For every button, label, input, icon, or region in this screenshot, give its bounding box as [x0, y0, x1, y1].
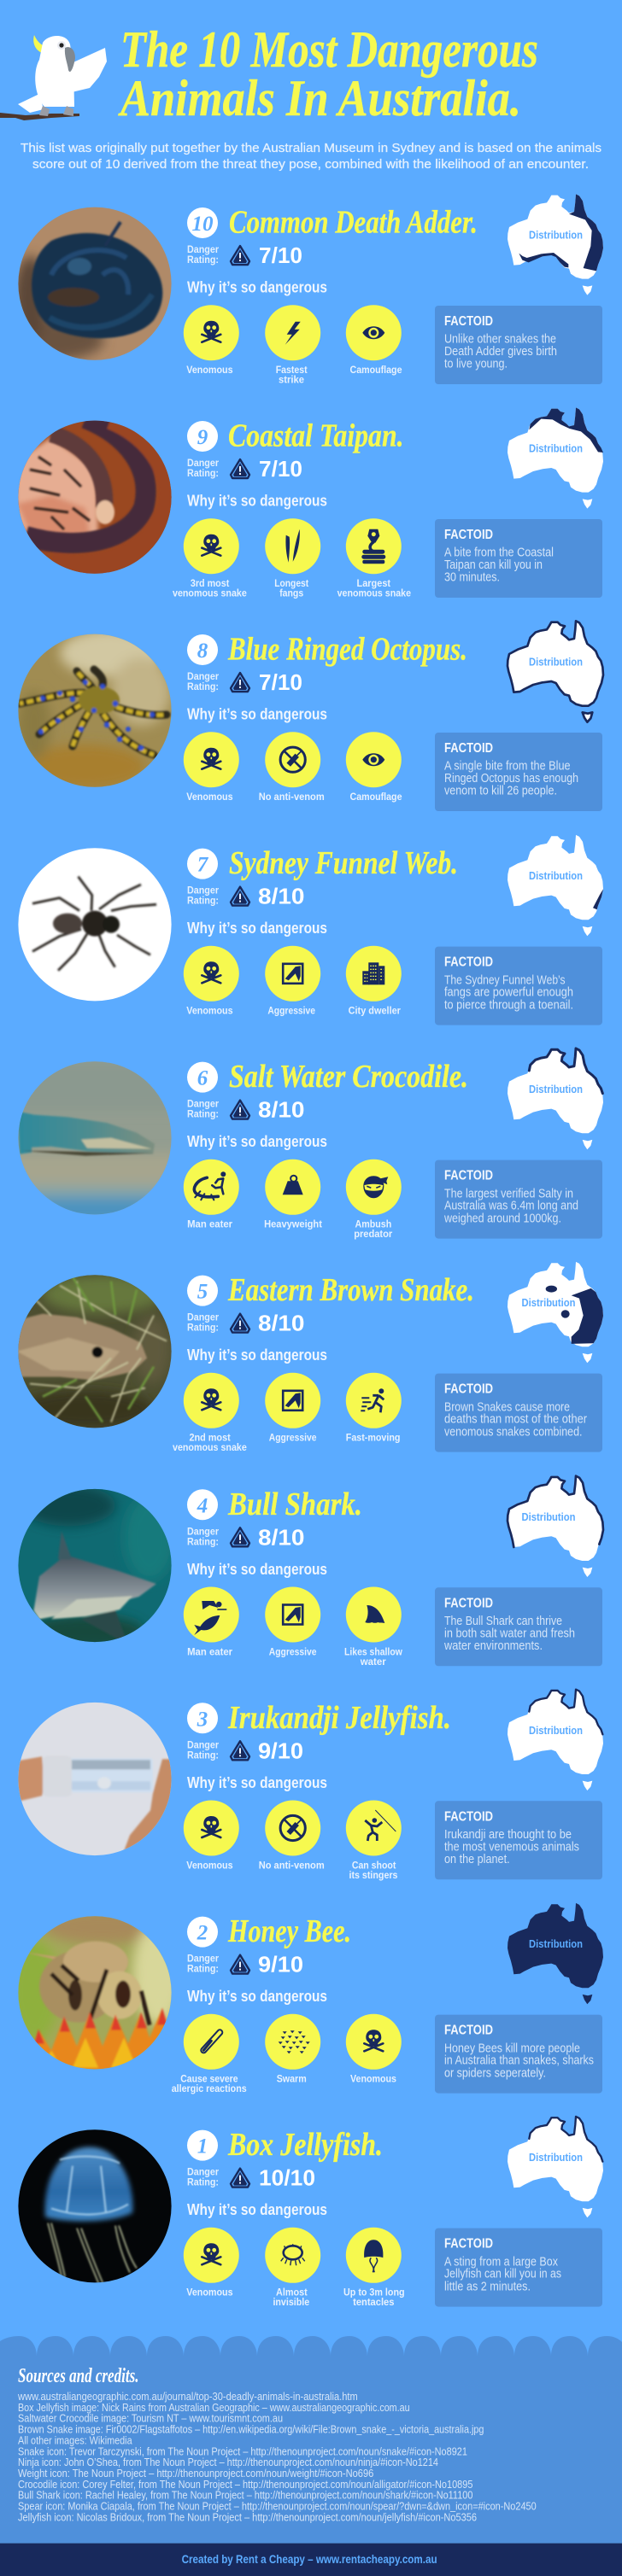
panel: 1 Box Jellyfish	[17, 2117, 603, 2308]
photo: death adder	[18, 207, 172, 360]
reason: venomous	[184, 946, 239, 1017]
reason: camouflage	[346, 732, 402, 803]
reason: up to 3m long tentacles	[343, 2228, 405, 2308]
factoid: FACTOID	[444, 1809, 493, 1824]
danger rating: 7/10	[259, 669, 302, 695]
factoid: weighed around 1000kg.	[443, 1212, 561, 1225]
distribution map	[508, 1476, 603, 1577]
reason: venomous: Venomous	[350, 2073, 396, 2085]
distribution map	[508, 407, 603, 509]
photo: salt water crocodile	[18, 1061, 172, 1214]
danger rating	[187, 1738, 303, 1763]
reason: aggressive	[265, 946, 320, 1017]
factoid: fangs are powerful enough	[444, 986, 573, 1000]
panel: sources and credits	[0, 2336, 622, 2543]
distribution map	[508, 835, 603, 936]
credits list: Weight icon: The Noun Project – http://thenounproject.com/noun/weight/#icon-No696	[18, 2468, 373, 2480]
distribution map: Distribution	[529, 656, 583, 668]
distribution map	[508, 2117, 603, 2217]
reason: man eater: Man eater	[187, 1645, 232, 1657]
danger rating	[187, 456, 302, 482]
factoid	[435, 2015, 602, 2094]
danger rating: Danger	[187, 243, 219, 255]
credits list	[17, 2391, 537, 2523]
reason: aggressive	[265, 1373, 320, 1444]
factoid: Irukandji are thought to be	[444, 1828, 572, 1842]
animal name: Common Death Adder.	[229, 205, 478, 241]
credits list: Snake icon: Trevor Tarczynski, from The Noun Project – http://thenounproject.com/noun/snake/#icon-No8921	[18, 2445, 467, 2457]
photo: bull shark	[17, 1485, 175, 1649]
rank badge: 3	[197, 1708, 208, 1731]
danger rating: 8/10	[258, 1311, 304, 1336]
factoid: Honey Bees kill more people	[444, 2042, 580, 2055]
distribution map	[508, 1262, 603, 1363]
distribution map	[508, 194, 603, 295]
animal name: Coastal Taipan.	[228, 418, 404, 454]
animal name: Blue Ringed Octopus.	[227, 632, 467, 668]
reason: city dweller	[346, 946, 402, 1017]
photo: honey bee on flower	[18, 1916, 172, 2070]
reason: likes shallow water	[344, 1586, 402, 1668]
reason: ambush predator	[346, 1159, 402, 1240]
factoid: The Bull Shark can thrive	[444, 1615, 562, 1628]
panel: 7 Sydney Funnel Web	[17, 835, 603, 1025]
danger rating	[187, 669, 302, 695]
danger rating: Danger	[187, 1311, 219, 1323]
rank badge	[187, 207, 218, 238]
factoid: The Sydney Funnel Web’s	[444, 973, 566, 987]
subheading: Why it’s so dangerous	[187, 1561, 327, 1578]
danger rating: 9/10	[258, 1952, 303, 1977]
credits heading: Sources and credits.	[18, 2365, 138, 2387]
reason: venomous: Venomous	[186, 1859, 233, 1871]
panel: 2 Honey Bee	[9, 1903, 603, 2094]
factoid: venomous snakes combined.	[444, 1425, 583, 1439]
reason: up to 3m long tentacles: Up to 3m long	[343, 2287, 405, 2299]
danger rating	[187, 1524, 304, 1550]
danger rating	[187, 2165, 315, 2191]
reason: swarm: Swarm	[277, 2073, 307, 2085]
reason: fast-moving	[346, 1373, 402, 1444]
factoid: deaths than most of the other	[444, 1413, 587, 1427]
rank badge	[187, 1703, 218, 1733]
reason: swarm	[265, 2014, 320, 2085]
animal name: Irukandji Jellyfish.	[227, 1700, 451, 1736]
reason: man eater	[184, 1159, 239, 1230]
reason: venomous	[184, 1800, 239, 1871]
reason: almost invisible: invisible	[273, 2296, 309, 2308]
reason: likes shallow water: water	[360, 1656, 386, 1668]
subheading: Why it’s so dangerous	[187, 278, 327, 295]
reason: venomous	[184, 305, 239, 376]
danger rating: Danger	[187, 885, 219, 897]
reason: no anti-venom	[259, 1800, 325, 1871]
factoid: FACTOID	[444, 741, 493, 756]
photo: coastal taipan	[15, 418, 174, 575]
reason: cause severe allergic reactions: Cause severe	[180, 2073, 238, 2085]
factoid	[435, 1374, 602, 1452]
factoid: FACTOID	[444, 314, 493, 329]
credits list: www.australiangeographic.com.au/journal/top-30-deadly-animals-in-australia.htm	[17, 2391, 358, 2403]
danger rating: Rating:	[187, 1749, 219, 1761]
subheading: Why it’s so dangerous	[187, 1346, 327, 1364]
distribution map: Distribution	[529, 442, 583, 454]
animal name: Salt Water Crocodile.	[229, 1059, 468, 1095]
reason: ambush predator: predator	[354, 1228, 392, 1240]
factoid: on the planet.	[444, 1853, 510, 1866]
reason: fastest strike: Fastest	[276, 364, 308, 376]
panel: 3 Irukandji Jellyfish	[13, 1690, 603, 1881]
reason: 3rd most venomous snake	[173, 518, 247, 599]
animal name: Honey Bee.	[227, 1913, 351, 1949]
rank badge	[187, 1276, 218, 1306]
factoid: The largest verified Salty in	[444, 1187, 573, 1200]
reason: aggressive	[265, 1586, 320, 1657]
photo: funnel web spider	[17, 846, 174, 1003]
factoid	[435, 306, 602, 384]
reason: longest fangs	[265, 518, 320, 599]
intro text: This list was originally put together by the Australian Museum in Sydney and is based on the animals	[21, 142, 601, 155]
factoid: FACTOID	[444, 2024, 493, 2038]
animal name: Bull Shark.	[227, 1487, 362, 1522]
reason: no anti-venom: No anti-venom	[259, 1859, 325, 1871]
animal name: Box Jellyfish.	[227, 2127, 383, 2163]
reason: 2nd most venomous snake: venomous snake	[173, 1441, 247, 1453]
credits list: Bull Shark icon: Rachel Healey, from The Noun Project – http://thenounproject.com/noun/shark/#icon-No11100	[18, 2490, 472, 2502]
reason: venomous: Venomous	[186, 1005, 233, 1017]
factoid: FACTOID	[444, 955, 493, 970]
danger rating: Danger	[187, 2166, 219, 2178]
factoid: water environments.	[443, 1639, 543, 1653]
distribution map	[508, 621, 603, 722]
danger rating: Danger	[187, 1525, 219, 1537]
animal name: Eastern Brown Snake.	[227, 1272, 474, 1308]
reason: man eater	[184, 1586, 239, 1657]
factoid: in both salt water and fresh	[444, 1627, 575, 1640]
animal name: Sydney Funnel Web.	[229, 845, 458, 881]
reason: can shoot its stingers	[346, 1800, 402, 1881]
factoid	[435, 733, 602, 811]
reason: aggressive: Aggressive	[267, 1005, 315, 1017]
factoid: Death Adder gives birth	[444, 345, 557, 359]
reason: can shoot its stingers: its stingers	[349, 1869, 398, 1881]
credits list: Box Jellyfish image: Nick Rains from Australian Geographic – www.australiangeographic.com.au	[18, 2402, 410, 2414]
reason: camouflage	[346, 305, 402, 376]
credits list: Crocodile icon: Corey Felter, from The Noun Project – http://thenounproject.com/noun/alligator/#icon-No10895	[18, 2479, 472, 2491]
factoid	[435, 519, 602, 598]
danger rating: Danger	[187, 457, 219, 469]
title: Animals In Australia.	[118, 70, 521, 126]
danger rating: 8/10	[258, 1097, 304, 1123]
factoid: FACTOID	[444, 2237, 493, 2252]
reason: aggressive: Aggressive	[269, 1432, 317, 1444]
factoid: venom to kill 26 people.	[444, 785, 557, 798]
distribution map: Distribution	[529, 1937, 583, 1950]
danger rating	[187, 884, 304, 909]
reason: heavyweight	[264, 1159, 322, 1230]
subheading: Why it’s so dangerous	[187, 1133, 327, 1150]
danger rating: Danger	[187, 1738, 219, 1750]
danger rating	[187, 1311, 304, 1336]
factoid	[435, 1160, 602, 1239]
reason: up to 3m long tentacles: tentacles	[353, 2296, 395, 2308]
photo: irukandji in a vial	[18, 1703, 172, 1856]
distribution map: Distribution	[529, 2151, 583, 2164]
distribution map: Distribution	[529, 1724, 583, 1737]
factoid: FACTOID	[444, 1382, 493, 1397]
reason: no anti-venom: No anti-venom	[259, 791, 325, 803]
distribution map	[508, 1690, 603, 1790]
subheading: Why it’s so dangerous	[187, 1774, 327, 1791]
reason: venomous	[346, 2014, 402, 2085]
factoid: FACTOID	[444, 528, 493, 542]
reason: 2nd most venomous snake: 2nd most	[189, 1432, 231, 1444]
photo: box jellyfish	[17, 2128, 174, 2285]
title: The 10 Most Dangerous	[120, 21, 538, 78]
reason: venomous: Venomous	[186, 2287, 233, 2299]
reason: cause severe allergic reactions: allergic reactions	[172, 2082, 247, 2094]
distribution map: Distribution	[529, 229, 583, 241]
subheading: Why it’s so dangerous	[187, 920, 327, 937]
danger rating: Danger	[187, 1953, 219, 1965]
photo: blue ringed octopus	[17, 629, 174, 789]
factoid: little as 2 minutes.	[444, 2280, 531, 2293]
reason: cause severe allergic reactions	[172, 2014, 247, 2094]
panel: 10 Common Death Adder	[2, 194, 603, 386]
danger rating: 8/10	[258, 884, 304, 909]
rank badge	[187, 849, 218, 879]
reason: venomous: Venomous	[186, 791, 233, 803]
danger rating: 7/10	[259, 456, 302, 482]
rank badge: 7	[197, 854, 209, 877]
danger rating	[187, 1952, 303, 1977]
rank badge: 4	[197, 1494, 208, 1517]
reason: fastest strike	[265, 305, 320, 386]
panel: 9 Coastal Taipan	[15, 407, 603, 599]
panel: 4 Bull Shark	[17, 1476, 603, 1668]
reason: largest venomous snake	[337, 518, 411, 599]
reason: fast-moving: Fast-moving	[346, 1432, 400, 1444]
factoid: Unlike other snakes the	[444, 333, 556, 347]
danger rating: Rating:	[187, 1535, 219, 1547]
danger rating: Rating:	[187, 895, 219, 907]
danger rating	[187, 242, 302, 268]
rank badge: 9	[197, 426, 208, 449]
rank badge	[187, 2130, 218, 2161]
factoid	[435, 2228, 602, 2307]
distribution map: Distribution	[521, 1296, 576, 1309]
factoid: Ringed Octopus has enough	[444, 772, 578, 786]
distribution map: Distribution	[529, 1083, 583, 1095]
factoid: Taipan can kill you in	[444, 558, 543, 572]
distribution map	[508, 1903, 603, 2004]
reason: 2nd most venomous snake	[173, 1373, 247, 1453]
factoid: to live young.	[444, 358, 508, 371]
reason: fastest strike: strike	[279, 374, 304, 386]
factoid: A sting from a large Box	[444, 2255, 559, 2269]
rank badge	[187, 421, 218, 452]
credits list: Brown Snake image: Fir0002/Flagstaffotos – http://en.wikipedia.org/wiki/File:Brown_snake_-_victoria_australia.jpg	[18, 2424, 484, 2436]
credits list: All other images: Wikimedia	[18, 2434, 132, 2446]
reason: camouflage: Camouflage	[350, 364, 402, 376]
danger rating: Rating:	[187, 1108, 219, 1120]
factoid: or spiders seperately.	[444, 2066, 546, 2080]
rank badge: 6	[197, 1067, 208, 1090]
title	[118, 21, 538, 126]
rank badge: 8	[197, 640, 208, 663]
reason: aggressive: Aggressive	[269, 1645, 317, 1657]
icon: cockatoo on branch	[0, 35, 107, 120]
rank badge: 1	[197, 2135, 208, 2158]
danger rating: Rating:	[187, 1963, 219, 1975]
photo: eastern brown snake	[15, 1273, 174, 1430]
intro text: score out of 10 derived from the threat they pose, combined with the likelihood of an encounter.	[32, 158, 589, 172]
factoid: Australia was 6.4m long and	[444, 1200, 578, 1213]
subheading: Why it’s so dangerous	[187, 705, 327, 722]
reason: almost invisible	[265, 2228, 320, 2308]
intro text	[21, 142, 601, 172]
reason: no anti-venom	[259, 732, 325, 803]
distribution map: Distribution	[529, 869, 583, 882]
rank badge: 10	[191, 213, 214, 236]
panel: 6 Salt Water Crocodile	[9, 1049, 603, 1240]
danger rating: Rating:	[187, 2176, 219, 2188]
reason: largest venomous snake: venomous snake	[337, 587, 411, 599]
reason: venomous	[184, 732, 239, 803]
factoid: 30 minutes.	[444, 571, 500, 585]
credits list: Ninja icon: John O’Shea, from The Noun Project – http://thenounproject.com/noun/ninja/#icon-No1214	[18, 2456, 438, 2468]
factoid: Jellyfish can kill you in as	[444, 2268, 561, 2281]
subheading: Why it’s so dangerous	[187, 2201, 327, 2218]
reason: camouflage: Camouflage	[350, 791, 402, 803]
factoid	[435, 1801, 602, 1879]
danger rating: 9/10	[258, 1738, 303, 1763]
factoid: FACTOID	[444, 1596, 493, 1610]
danger rating	[187, 1097, 304, 1123]
danger rating: 10/10	[259, 2165, 315, 2191]
reason: longest fangs: fangs	[279, 587, 303, 599]
factoid: the most venemous animals	[444, 1840, 579, 1854]
factoid: FACTOID	[444, 1169, 493, 1183]
danger rating: Rating:	[187, 681, 219, 692]
panel: 5 Eastern Brown Snake	[15, 1262, 603, 1453]
reason: heavyweight: Heavyweight	[264, 1218, 322, 1230]
footer bar	[0, 2543, 622, 2576]
danger rating: Danger	[187, 1098, 219, 1110]
rank badge	[187, 1489, 218, 1520]
factoid	[435, 947, 602, 1025]
footer bar: Created by Rent a Cheapy – www.rentacheapy.com.au	[182, 2552, 437, 2566]
reason: 3rd most venomous snake: venomous snake	[173, 587, 247, 599]
reason: can shoot its stingers: Can shoot	[352, 1859, 396, 1871]
panel: 8 Blue Ringed Octopus	[17, 621, 603, 811]
factoid: A single bite from the Blue	[444, 760, 571, 774]
subheading: Why it’s so dangerous	[187, 492, 327, 509]
danger rating: Rating:	[187, 467, 219, 479]
danger rating: Rating:	[187, 1322, 219, 1334]
rank badge: 5	[197, 1281, 208, 1304]
reason: venomous: Venomous	[186, 364, 233, 376]
danger rating: Rating:	[187, 254, 219, 266]
reason: man eater: Man eater	[187, 1218, 232, 1230]
distribution map	[508, 1049, 603, 1149]
danger rating: Danger	[187, 670, 219, 682]
rank badge	[187, 634, 218, 665]
rank badge	[187, 1062, 218, 1093]
credits list: Spear icon: Monika Ciapala, from The Noun Project – http://thenounproject.com/noun/spear/?dwn=&dwn_icon=#icon-No2450	[18, 2500, 537, 2512]
reason: likes shallow water: Likes shallow	[344, 1645, 402, 1657]
reason: ambush predator: Ambush	[355, 1218, 391, 1230]
danger rating: 8/10	[258, 1524, 304, 1550]
danger rating: 7/10	[259, 242, 302, 268]
credits list: Saltwater Crocodile image: Tourism NT – www.tourismnt.com.au	[18, 2413, 283, 2425]
reason: largest venomous snake: Largest	[357, 577, 390, 589]
reason: longest fangs: Longest	[274, 577, 308, 589]
factoid: Brown Snakes cause more	[444, 1400, 570, 1414]
factoid: to pierce through a toenail.	[444, 998, 573, 1012]
factoid: in Australia than snakes, sharks	[444, 2054, 594, 2068]
rank badge	[187, 1917, 218, 1948]
reason: almost invisible: Almost	[276, 2287, 308, 2299]
reason: 3rd most venomous snake: 3rd most	[191, 577, 229, 589]
credits list: Jellyfish icon: Nicolas Bridoux, from The Noun Project – http://thenounproject.com/noun/jellyfish/#icon-No5356	[18, 2511, 477, 2523]
distribution map: Distribution	[521, 1510, 576, 1523]
factoid	[435, 1587, 602, 1666]
rank badge: 2	[197, 1922, 208, 1945]
subheading: Why it’s so dangerous	[187, 1988, 327, 2005]
reason: city dweller: City dweller	[349, 1005, 401, 1017]
reason: venomous	[184, 2228, 239, 2299]
factoid: A bite from the Coastal	[444, 546, 554, 560]
